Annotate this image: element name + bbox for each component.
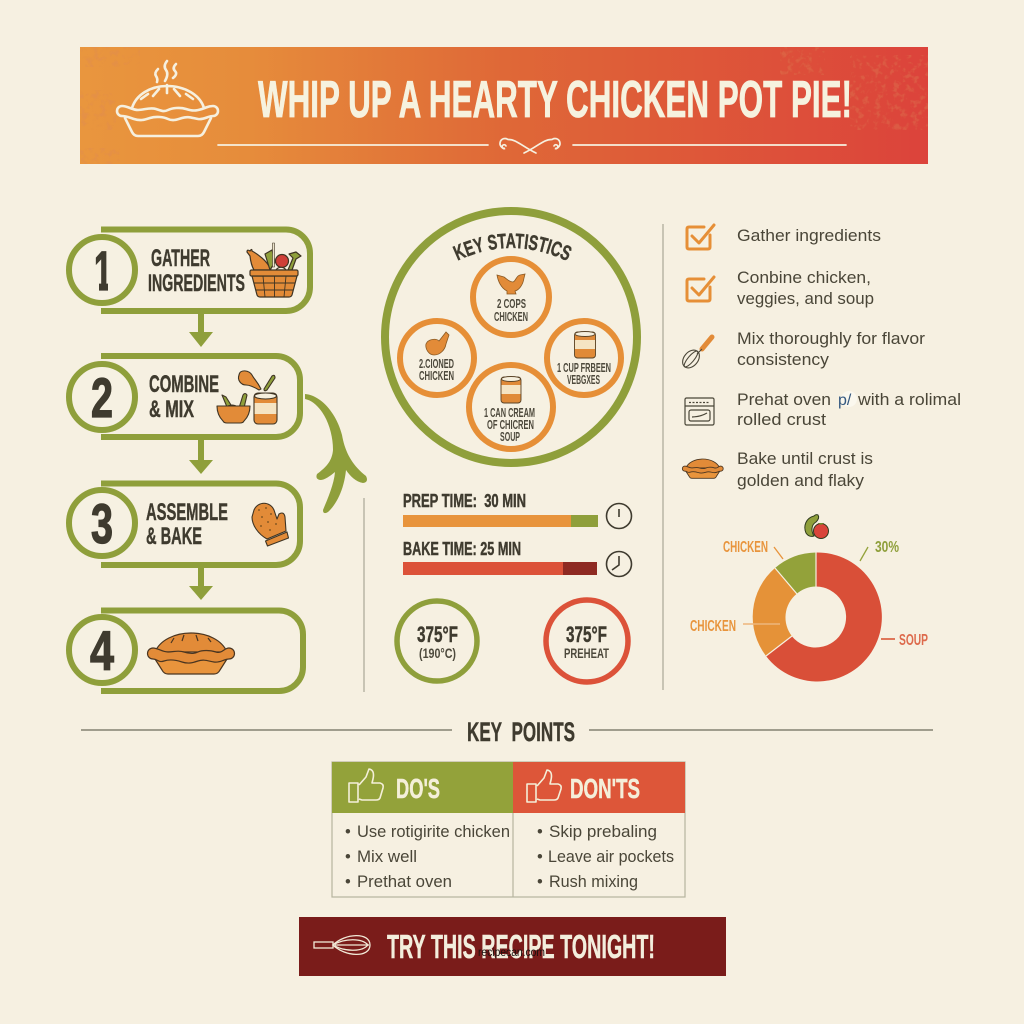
do's column: DO'S: [396, 773, 440, 804]
don'ts column: •: [537, 873, 543, 891]
item: combine: Conbine chicken,: [737, 268, 871, 287]
arrow: curved flow to statistics: [305, 394, 367, 513]
donut chart: CHICKEN: [690, 618, 736, 635]
do's column: Mix well: [357, 848, 417, 866]
stat: frozen veggies: VEBGXES: [567, 373, 600, 387]
don'ts column: [513, 762, 685, 891]
step 1: GATHER: [151, 245, 210, 272]
temperature badge: preheat: [546, 600, 628, 682]
temperature badge: preheat: 375°F: [566, 622, 607, 647]
don'ts column: Skip prebaling: [549, 823, 657, 841]
item: mix: consistency: [737, 350, 830, 369]
temperature badge: celsius: (190°C): [419, 645, 456, 661]
panel: time bars: [397, 491, 632, 682]
do's column: Prethat oven: [357, 873, 452, 891]
icon: basket: [247, 243, 301, 297]
item: gather: Gather ingredients: [737, 226, 881, 245]
don'ts column: •: [537, 848, 543, 866]
step 2: & MIX: [149, 396, 194, 423]
stat: chicken top: [473, 259, 549, 335]
section heading: key points: KEY POINTS: [467, 717, 575, 747]
do's column: Use rotigirite chicken: [357, 823, 510, 841]
panel: steps flow: [69, 230, 367, 691]
don'ts column: •: [537, 823, 543, 841]
step 3: ASSEMBLE: [146, 499, 228, 526]
item: bake: Bake until crust is: [737, 449, 873, 468]
donut chart: CHICKEN: [723, 539, 768, 556]
icon: oven mitt: [252, 503, 288, 546]
do's column: •: [345, 823, 351, 841]
stat: frozen veggies: 1 CUP FRBEEN: [557, 361, 611, 375]
bake time: [403, 539, 632, 576]
stat: chicken left: 2.CIONED: [419, 357, 454, 371]
item: preheat: p/: [838, 392, 852, 409]
step 2: 2: [91, 366, 113, 429]
bake time: BAKE TIME: 25 MIN: [403, 539, 521, 559]
stat: cream of chicken soup: SOUP: [500, 430, 520, 444]
step 3: 3: [91, 492, 113, 555]
stat: cream of chicken soup: 1 CAN CREAM: [484, 406, 535, 420]
call to action banner: recipecan.com: [478, 945, 545, 959]
donut chart: SOUP: [899, 632, 928, 649]
icon: steaming pie: [117, 61, 218, 136]
item: combine: [687, 268, 874, 308]
arrow: step 2 to 3: [189, 440, 213, 474]
do's column: •: [345, 873, 351, 891]
prep time: [403, 491, 632, 528]
temperature badge: celsius: [397, 601, 477, 681]
arrow: step 1 to 2: [189, 314, 213, 347]
step 1: 1: [94, 239, 112, 302]
header banner: [80, 47, 928, 164]
icon: drumstick, bowl and can: [217, 371, 277, 424]
step 3: & BAKE: [146, 523, 202, 550]
call to action banner: [299, 917, 726, 976]
item: preheat: with a rolimal: [857, 390, 961, 409]
do's column: •: [345, 848, 351, 866]
item: preheat: Prehat oven: [737, 390, 831, 409]
step 2: COMBINE: [149, 371, 219, 398]
step 4: [69, 610, 303, 691]
curved heading: KEY STATISTICS: [452, 233, 572, 260]
ornament rule: [218, 138, 846, 153]
stat: chicken left: [400, 321, 474, 395]
stat: frozen veggies: [547, 321, 621, 395]
icon: whisk: [314, 936, 370, 954]
item: combine: veggies, and soup: [737, 289, 874, 308]
divider lines: [364, 224, 663, 692]
stat: chicken top: CHICKEN: [494, 310, 528, 324]
icon: vegetables: [805, 515, 828, 538]
donut chart: [690, 515, 928, 681]
temperature badge: celsius: 375°F: [417, 622, 458, 647]
do's column: [332, 762, 513, 891]
curved heading: [452, 233, 572, 260]
step 3: [69, 484, 300, 565]
icon: baked pie: [148, 633, 234, 674]
step 4: 4: [90, 619, 114, 682]
item: mix: Mix thoroughly for flavor: [737, 329, 925, 348]
temperature badge: preheat: PREHEAT: [564, 645, 609, 661]
step 2: [69, 356, 300, 437]
stat: cream of chicken soup: [469, 365, 553, 449]
prep time: PREP TIME: 30 MIN: [403, 491, 526, 511]
stat: chicken left: CHICKEN: [419, 369, 454, 383]
panel: do's and don'ts: [332, 762, 685, 897]
arrow: step 3 to 4: [189, 567, 213, 600]
icon: thumbs up on red: [527, 770, 561, 802]
don'ts column: Rush mixing: [549, 873, 638, 891]
item: gather: [687, 225, 881, 249]
item: mix: [679, 329, 925, 371]
icon: thumbs up: [349, 769, 383, 802]
panel: key statistics: [381, 207, 641, 467]
don'ts column: Leave air pockets: [548, 848, 674, 866]
item: bake: golden and flaky: [737, 471, 864, 490]
stat: chicken top: 2 COPS: [497, 297, 526, 311]
panel: checklist: [679, 225, 961, 490]
donut chart: 30%: [875, 539, 899, 556]
item: preheat: rolled crust: [737, 410, 826, 429]
call to action banner: TRY THIS RECIPE TONIGHT!: [387, 928, 655, 965]
don'ts column: DON'TS: [570, 773, 640, 804]
item: bake: [682, 449, 873, 490]
stat: cream of chicken soup: OF CHICREN: [487, 418, 534, 432]
step 1: [69, 230, 310, 311]
step 1: INGREDIENTS: [148, 270, 245, 297]
item: preheat: [685, 390, 961, 429]
